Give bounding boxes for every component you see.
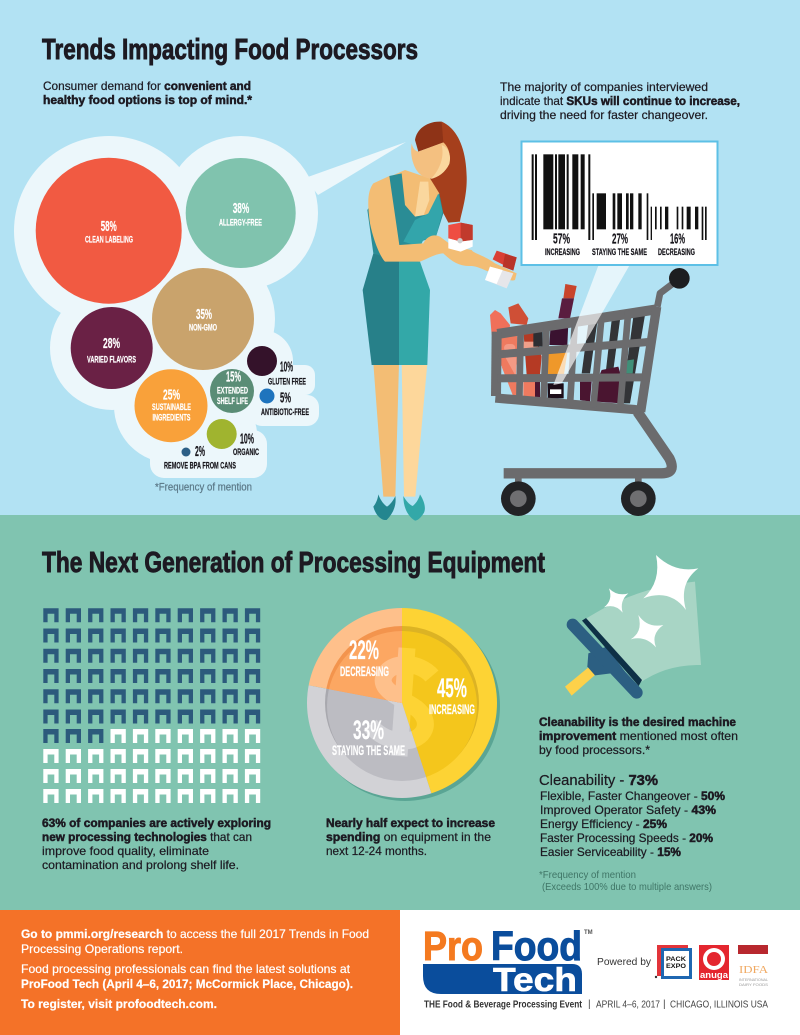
text block: SKUs: indicate that SKUs will continue to increase, bbox=[500, 94, 740, 108]
footnote: frequency of mention: *Frequency of mention bbox=[155, 482, 252, 494]
barcode chart: INCREASING bbox=[545, 247, 580, 258]
text block: 63 percent: improve food quality, eliminate bbox=[42, 844, 209, 858]
text: powered by: Powered by bbox=[597, 956, 652, 968]
icon: squeegee with sparkles bbox=[565, 555, 701, 696]
legs bbox=[373, 363, 399, 497]
arms bbox=[368, 176, 517, 280]
slice: decreasing bbox=[308, 608, 402, 703]
bubble: non-GMO bbox=[152, 268, 254, 370]
illustration: shopping cart bbox=[490, 266, 690, 516]
barcode labels: 57% bbox=[553, 230, 570, 247]
box in left hand bbox=[485, 251, 517, 288]
bubble: organic: 10% bbox=[240, 430, 254, 447]
text block: consumer demand: Consumer demand for convenient and bbox=[43, 79, 251, 93]
bubble: sustainable ingredients: INGREDIENTS bbox=[152, 413, 190, 424]
footnote: multiple answers: (Exceeds 100% due to multiple answers) bbox=[542, 881, 712, 893]
footnote: multiple answers bbox=[539, 869, 712, 893]
logo: ProFood Tech: Food bbox=[491, 923, 582, 969]
event tagline: APRIL 4–6, 2017 bbox=[596, 1000, 660, 1010]
text block: cleanability: Cleanability is the desired machine bbox=[539, 715, 736, 729]
text block: 63 percent: contamination and prolong shelf life. bbox=[42, 858, 239, 872]
pie chart: coin with spending expectations: STAYING THE SAME bbox=[332, 742, 405, 758]
pictogram: 63 of 100 companies bbox=[43, 608, 260, 803]
text block: SKUs: The majority of companies interviewed bbox=[500, 80, 708, 94]
bubble: remove BPA: REMOVE BPA FROM CANS bbox=[164, 460, 236, 471]
scan beam bbox=[553, 266, 629, 385]
bubble: clean labeling: 58% bbox=[101, 218, 117, 235]
pie chart: coin with spending expectations: DECREASING bbox=[340, 663, 389, 679]
bubble: organic: ORGANIC bbox=[233, 447, 259, 458]
logo: IDFA bbox=[738, 945, 769, 987]
groceries bbox=[490, 284, 645, 403]
text block: consumer demand bbox=[43, 79, 252, 107]
text block: 63 percent: new processing technologies that can bbox=[42, 830, 252, 844]
logo: IDFA: DAIRY FOODS bbox=[739, 983, 769, 987]
footer panel: call to action: Food processing professionals can find the latest solutions at bbox=[21, 962, 351, 976]
pie chart: coin with spending expectations bbox=[307, 608, 500, 801]
list: machine improvements: Improved Operator Safety - 43% bbox=[540, 803, 716, 817]
bubble: clean labeling bbox=[36, 158, 182, 304]
event tagline: | bbox=[663, 999, 666, 1010]
list: machine improvements: Easier Serviceability - 15% bbox=[540, 845, 681, 859]
footer panel: call to action: Go to pmmi.org/research to access the full 2017 Trends in Food bbox=[21, 927, 369, 941]
logo: IDFA: INTERNATIONAL bbox=[739, 978, 768, 982]
logo: ProFood Tech: Pro bbox=[423, 923, 483, 969]
bubble: gluten free bbox=[247, 346, 306, 387]
illustration: woman bbox=[363, 122, 517, 521]
bubble: gluten free: GLUTEN FREE bbox=[268, 376, 306, 387]
text block: spending bbox=[326, 816, 495, 858]
barcode chart: 16% bbox=[670, 230, 685, 247]
cart frame and wheels bbox=[495, 281, 677, 473]
pie chart: coin with spending expectations: 45% bbox=[437, 673, 467, 703]
bubble: remove BPA bbox=[164, 443, 236, 471]
footer panel: logos bbox=[400, 910, 800, 1035]
logo: Pack Expo: PACK bbox=[666, 956, 686, 963]
bubble backdrop bbox=[14, 136, 406, 478]
text block: cleanability: by food processors.* bbox=[539, 743, 650, 757]
text block: 63 percent bbox=[42, 816, 271, 872]
event tagline: CHICAGO, ILLINOIS USA bbox=[670, 1000, 768, 1010]
shoes bbox=[373, 494, 396, 520]
logo: Anuga bbox=[699, 945, 729, 980]
thought bubble with food attributes bbox=[14, 136, 406, 478]
dress bbox=[367, 173, 443, 265]
bubble: extended shelf life: EXTENDED bbox=[217, 385, 248, 396]
bubble: extended shelf life bbox=[210, 369, 254, 413]
text block: spending: spending on equipment in the bbox=[326, 830, 491, 844]
bubble: varied flavors: 28% bbox=[103, 335, 120, 352]
bubble: antibiotic-free bbox=[260, 388, 309, 418]
box in right hand bbox=[448, 223, 473, 252]
bubble: antibiotic-free: ANTIBIOTIC-FREE bbox=[261, 407, 309, 418]
pie chart: coin with spending expectations: INCREASING bbox=[429, 701, 475, 717]
logo: Anuga: anuga bbox=[700, 970, 729, 980]
barcode chart: 27% bbox=[612, 230, 628, 247]
footer panel: call to action bbox=[0, 910, 400, 1035]
list: machine improvements: Energy Efficiency - 25% bbox=[540, 817, 667, 831]
list: machine improvements: Flexible, Faster Changeover - 50% bbox=[540, 789, 725, 803]
barcode chart: DECREASING bbox=[658, 247, 695, 258]
bubble: sustainable ingredients bbox=[134, 369, 208, 442]
pie labels: 22% bbox=[349, 635, 379, 665]
bubble: organic bbox=[207, 419, 259, 458]
bubble: allergy-free: 38% bbox=[233, 200, 249, 217]
bubble: extended shelf life: 15% bbox=[226, 369, 241, 386]
hair back bbox=[428, 122, 467, 223]
bubble: clean labeling: CLEAN LABELING bbox=[85, 235, 133, 246]
barcode chart: STAYING THE SAME bbox=[592, 247, 647, 258]
logo: Pack Expo bbox=[655, 945, 692, 979]
event tagline: THE Food & Beverage Processing Event bbox=[424, 1000, 583, 1010]
bubble: sustainable ingredients: 25% bbox=[163, 386, 180, 403]
barcode chart bbox=[522, 142, 718, 265]
title: trends: Trends Impacting Food Processors bbox=[42, 34, 418, 66]
list: machine improvements: Faster Processing Speeds - 20% bbox=[540, 831, 713, 845]
slice: staying the same bbox=[307, 685, 432, 798]
bubble: allergy-free bbox=[186, 158, 296, 268]
barcode bars bbox=[532, 154, 707, 240]
bubble: non-GMO: NON-GMO bbox=[189, 323, 217, 334]
logo: ProFood Tech: TM bbox=[584, 930, 593, 936]
text block: spending: Nearly half expect to increase bbox=[326, 816, 495, 830]
text block: spending: next 12-24 months. bbox=[326, 844, 427, 858]
bubble: varied flavors bbox=[71, 307, 153, 389]
skin: neck and chest bbox=[390, 170, 439, 217]
text block: cleanability bbox=[539, 715, 738, 757]
text block: SKUs: driving the need for faster changeover. bbox=[500, 108, 708, 122]
bubble: gluten free: 10% bbox=[280, 359, 293, 376]
bubble: extended shelf life: SHELF LIFE bbox=[217, 396, 248, 407]
text block: 63 percent: 63% of companies are actively exploring bbox=[42, 816, 271, 830]
list: machine improvements bbox=[539, 772, 725, 859]
bubble: remove BPA: 2% bbox=[195, 443, 205, 460]
text block: cleanability: improvement mentioned most often bbox=[539, 729, 738, 743]
text block: SKUs bbox=[500, 80, 740, 122]
logo: ProFood Tech bbox=[423, 923, 593, 998]
footnote: multiple answers: *Frequency of mention bbox=[539, 869, 636, 881]
bubble: allergy-free: ALLERGY-FREE bbox=[219, 218, 262, 229]
logo: Pack Expo: EXPO bbox=[666, 963, 686, 970]
text block: consumer demand: healthy food options is top of mind.* bbox=[43, 93, 252, 107]
background: top section bbox=[0, 0, 800, 515]
logo: ProFood Tech: Tech bbox=[493, 961, 577, 998]
face bbox=[411, 142, 450, 178]
event tagline bbox=[424, 999, 768, 1010]
logo: IDFA: IDFA bbox=[739, 964, 768, 976]
background: equipment section bbox=[0, 515, 800, 910]
pie chart: coin with spending expectations: 33% bbox=[353, 715, 384, 745]
footer panel: call to action: Processing Operations report. bbox=[21, 942, 183, 956]
bubble: non-GMO: 35% bbox=[196, 306, 212, 323]
title: next generation: The Next Generation of Processing Equipment bbox=[42, 547, 545, 579]
footer panel: call to action: To register, visit profoodtech.com. bbox=[21, 997, 217, 1011]
bubble: sustainable ingredients: SUSTAINABLE bbox=[152, 402, 191, 413]
footer panel: call to action: ProFood Tech (April 4–6, 2017; McCormick Place, Chicago). bbox=[21, 977, 353, 991]
list: machine improvements: Cleanability - 73% bbox=[539, 772, 658, 789]
bubble: antibiotic-free: 5% bbox=[280, 389, 291, 406]
event tagline: | bbox=[588, 999, 591, 1010]
bubble: varied flavors: VARIED FLAVORS bbox=[87, 355, 136, 366]
slice: increasing bbox=[402, 608, 497, 794]
